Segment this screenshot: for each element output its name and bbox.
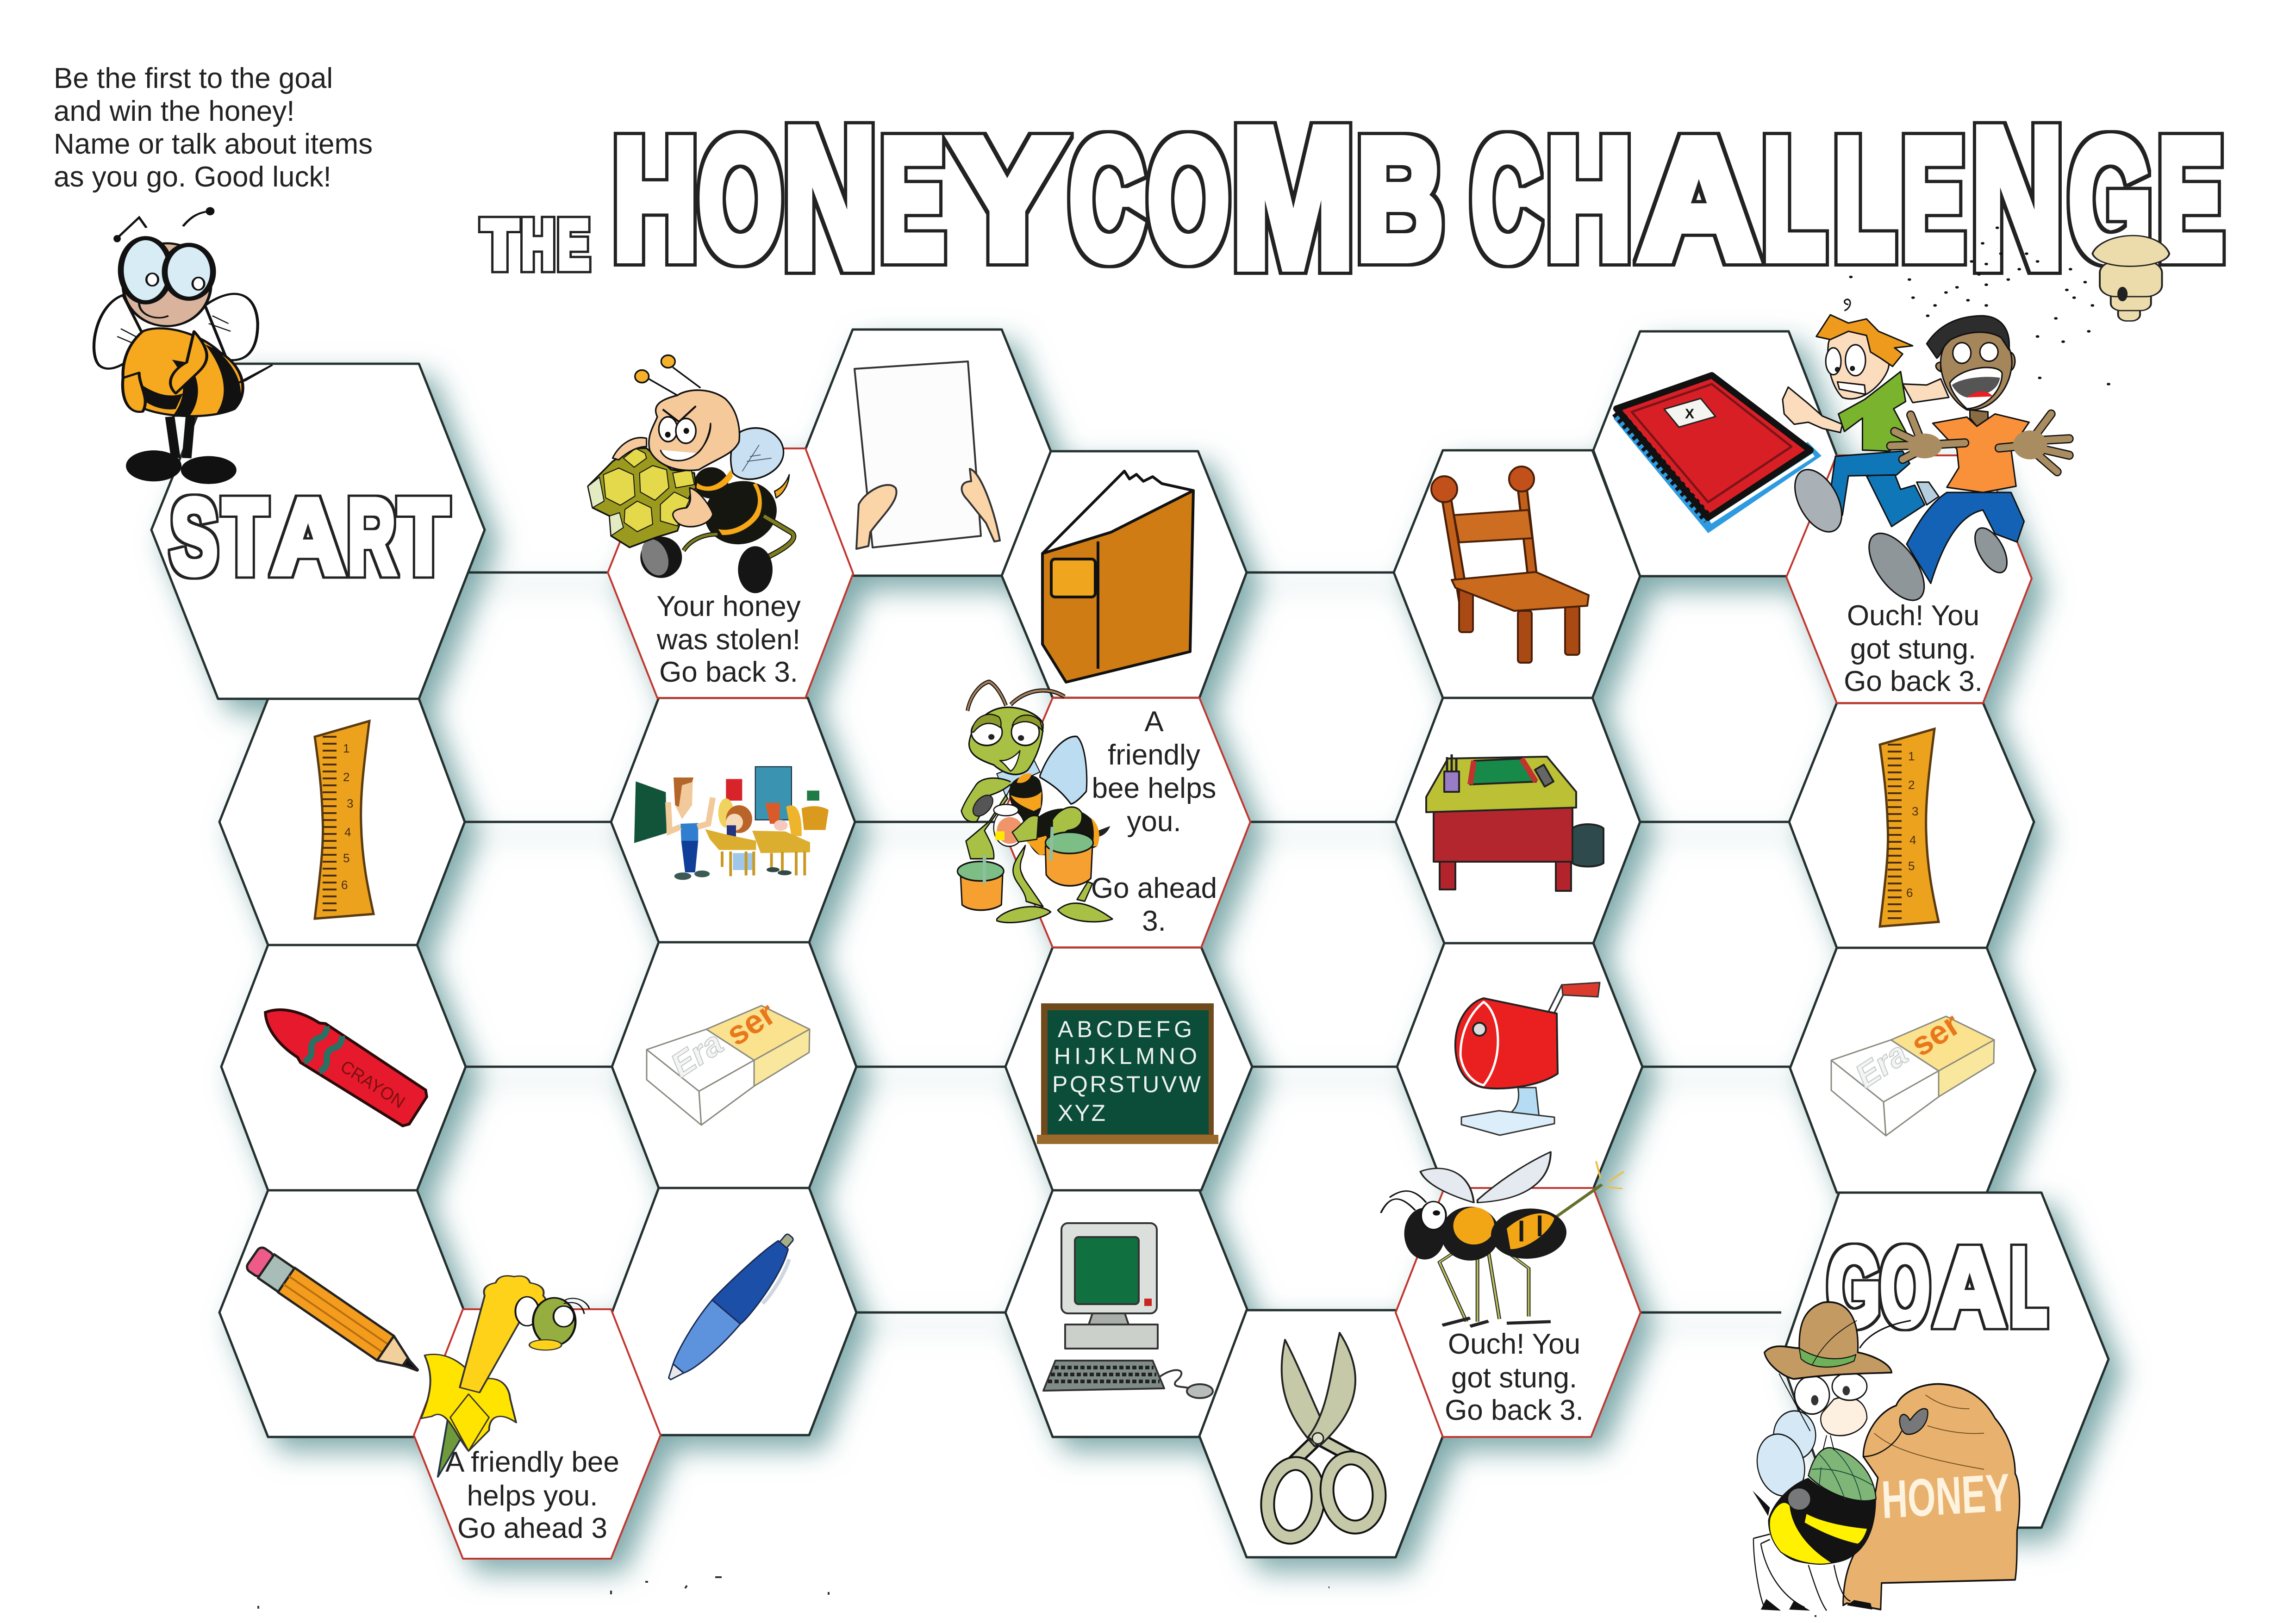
hex: ruler 2 (1789, 703, 2034, 948)
icon: ruler: 3 (347, 796, 353, 810)
intro text: and win the honey! (54, 95, 294, 127)
icon: friendly bee with honey pots (957, 682, 1112, 923)
icon: pencil sharpener (1455, 983, 1600, 1135)
icon: ruler: 2 (343, 770, 349, 784)
title: honeycomb challenge: E (2159, 105, 2223, 293)
text: stung lower: Go back 3. (1445, 1394, 1584, 1426)
icon: beehive with swarm (1851, 228, 2169, 384)
icon: ruler (315, 721, 374, 919)
icon: eraser: ser (720, 995, 782, 1053)
hex: honey stolen square (608, 448, 853, 698)
title: the: E (558, 205, 589, 283)
start label: S (171, 478, 218, 596)
icon: blackboard (1037, 1003, 1218, 1144)
start label (171, 478, 448, 596)
hex: pencil (219, 1190, 465, 1437)
icon: scissors (1263, 1333, 1384, 1541)
icon: desk (1426, 754, 1603, 891)
title: honeycomb challenge: E (1902, 105, 1964, 293)
hex: blackboard (1005, 947, 1252, 1190)
hex: desk (1396, 698, 1640, 943)
text: flower bee helps: helps you. (467, 1480, 598, 1512)
hex: eraser (612, 942, 856, 1188)
goal label: L (2010, 1226, 2047, 1348)
title: honeycomb challenge: O (1148, 105, 1229, 293)
intro text: Name or talk about items (54, 128, 373, 160)
title: the: T (482, 205, 518, 283)
icon: book (1042, 471, 1193, 682)
icon: paper with hands (855, 361, 1000, 549)
icon: notebook: X (1685, 406, 1694, 422)
hex: flower penalty square (414, 1309, 661, 1559)
text: stung upper: Go back 3. (1844, 665, 1983, 697)
text: friendly bee helps: you. (1127, 806, 1181, 838)
icon: frightened boys (1783, 299, 2069, 610)
icon: ruler 2: 2 (1908, 778, 1915, 792)
hex: crayon (221, 945, 466, 1190)
icon: ruler 2 (1880, 729, 1939, 927)
text: friendly bee helps: A (1144, 706, 1164, 738)
icon: pencil (244, 1245, 426, 1382)
title: the: H (521, 205, 555, 283)
icon: ruler 2: 6 (1906, 886, 1913, 900)
hex: paper (805, 330, 1051, 576)
icon: eraser: Era (664, 1024, 730, 1084)
icon: eraser 2: ser (1904, 1005, 1966, 1063)
hex: ruler (219, 699, 465, 945)
hex: notebook (1593, 331, 1837, 576)
hex: book (1002, 451, 1247, 698)
icon: ruler 2: 3 (1912, 804, 1918, 818)
icon: notebook (1614, 375, 1822, 533)
icon: ruler: 6 (341, 878, 348, 892)
hex: classroom (611, 698, 855, 942)
text: honey stolen: Go back 3. (659, 656, 798, 688)
icon: blackboard: ABCDEFG (1058, 1016, 1192, 1042)
start label: T (399, 478, 448, 596)
stray scan specks (258, 1577, 1816, 1616)
icon: crayon (253, 993, 430, 1130)
hex: goal (1781, 1193, 2109, 1528)
title: honeycomb challenge: E (881, 105, 944, 293)
hex: computer (1005, 1190, 1248, 1437)
icon: ruler 2: 1 (1908, 749, 1915, 763)
hex: pen (612, 1188, 856, 1435)
connector lines (465, 572, 1790, 1312)
icon: honey thief bee (588, 355, 794, 593)
icon: ruler 2: 4 (1909, 833, 1916, 847)
honeycomb board (151, 330, 2109, 1559)
hex: friendly bee square (1000, 698, 1250, 947)
icon: wasp (1381, 1152, 1624, 1326)
icon: ruler: 5 (343, 851, 349, 865)
icon: pen (655, 1224, 808, 1393)
title: the (482, 205, 589, 283)
text: honey stolen: Your honey (656, 591, 801, 622)
title: honeycomb challenge: G (2069, 105, 2151, 293)
icon: bee with honey hive at goal: HONEY (1880, 1462, 2011, 1530)
title: honeycomb challenge: M (1232, 88, 1354, 308)
hex: wasp square (1396, 1188, 1641, 1437)
start label: T (223, 478, 267, 596)
title: honeycomb challenge (613, 88, 2223, 308)
title: honeycomb challenge: Y (952, 105, 1063, 293)
title: honeycomb challenge: L (1834, 105, 1895, 293)
icon: blackboard: PQRSTUVW (1052, 1071, 1201, 1097)
text: honey stolen: was stolen! (656, 624, 800, 656)
goal label (1828, 1226, 2047, 1348)
title: honeycomb challenge: H (1547, 105, 1631, 293)
title: honeycomb challenge: C (1070, 105, 1143, 293)
icon: bee with honey hive at goal (1748, 1302, 2020, 1611)
title: honeycomb challenge: L (1763, 105, 1825, 293)
start label: R (348, 478, 395, 596)
title: honeycomb challenge: A (1640, 105, 1758, 293)
goal label: O (1880, 1226, 1930, 1348)
icon: bee at start (94, 207, 272, 484)
text: stung upper: Ouch! You (1847, 600, 1979, 632)
text: stung lower: Ouch! You (1448, 1328, 1580, 1360)
icon: blackboard: XYZ (1058, 1100, 1105, 1126)
start label: A (272, 478, 344, 596)
hex: scissors (1199, 1310, 1443, 1557)
icon: flower with bee (421, 1276, 589, 1477)
title: honeycomb challenge: N (1972, 88, 2063, 308)
title: honeycomb challenge: B (1357, 105, 1443, 293)
intro text: Be the first to the goal (54, 62, 333, 94)
hex: sharpener (1397, 943, 1642, 1188)
title: honeycomb challenge: O (699, 105, 782, 293)
icon: eraser 2: Era (1849, 1035, 1914, 1095)
icon: ruler: 1 (343, 741, 349, 755)
text: flower bee helps: Go ahead 3 (457, 1512, 607, 1544)
icon: classroom (634, 767, 829, 880)
text: friendly bee helps: Go ahead (1091, 872, 1217, 904)
hex: chair (1394, 450, 1640, 698)
text: friendly bee helps: 3. (1142, 905, 1166, 937)
icon: eraser (647, 995, 810, 1125)
title: honeycomb challenge: C (1472, 105, 1540, 293)
text: friendly bee helps: friendly (1108, 739, 1200, 771)
icon: eraser 2 (1831, 1005, 1994, 1136)
icon: chair (1431, 466, 1589, 663)
hex: stung square (1786, 455, 2032, 703)
goal label: G (1828, 1226, 1880, 1348)
hex: start (151, 364, 485, 699)
title: honeycomb challenge: H (613, 105, 697, 293)
icon: computer (1043, 1223, 1213, 1398)
text: friendly bee helps: bee helps (1092, 772, 1216, 804)
title: honeycomb challenge: N (783, 88, 876, 308)
icon: blackboard: HIJKLMNO (1054, 1043, 1197, 1069)
icon: crayon: CRAYON (337, 1056, 409, 1112)
icon: ruler: 4 (344, 825, 351, 839)
text: flower bee helps: A friendly bee (445, 1446, 619, 1478)
text: stung upper: got stung. (1850, 633, 1976, 665)
text: stung lower: got stung. (1451, 1362, 1577, 1394)
intro text: as you go. Good luck! (54, 161, 331, 193)
goal label: A (1935, 1226, 2004, 1348)
icon: ruler 2: 5 (1908, 859, 1915, 873)
hex: eraser 2 (1790, 948, 2035, 1193)
